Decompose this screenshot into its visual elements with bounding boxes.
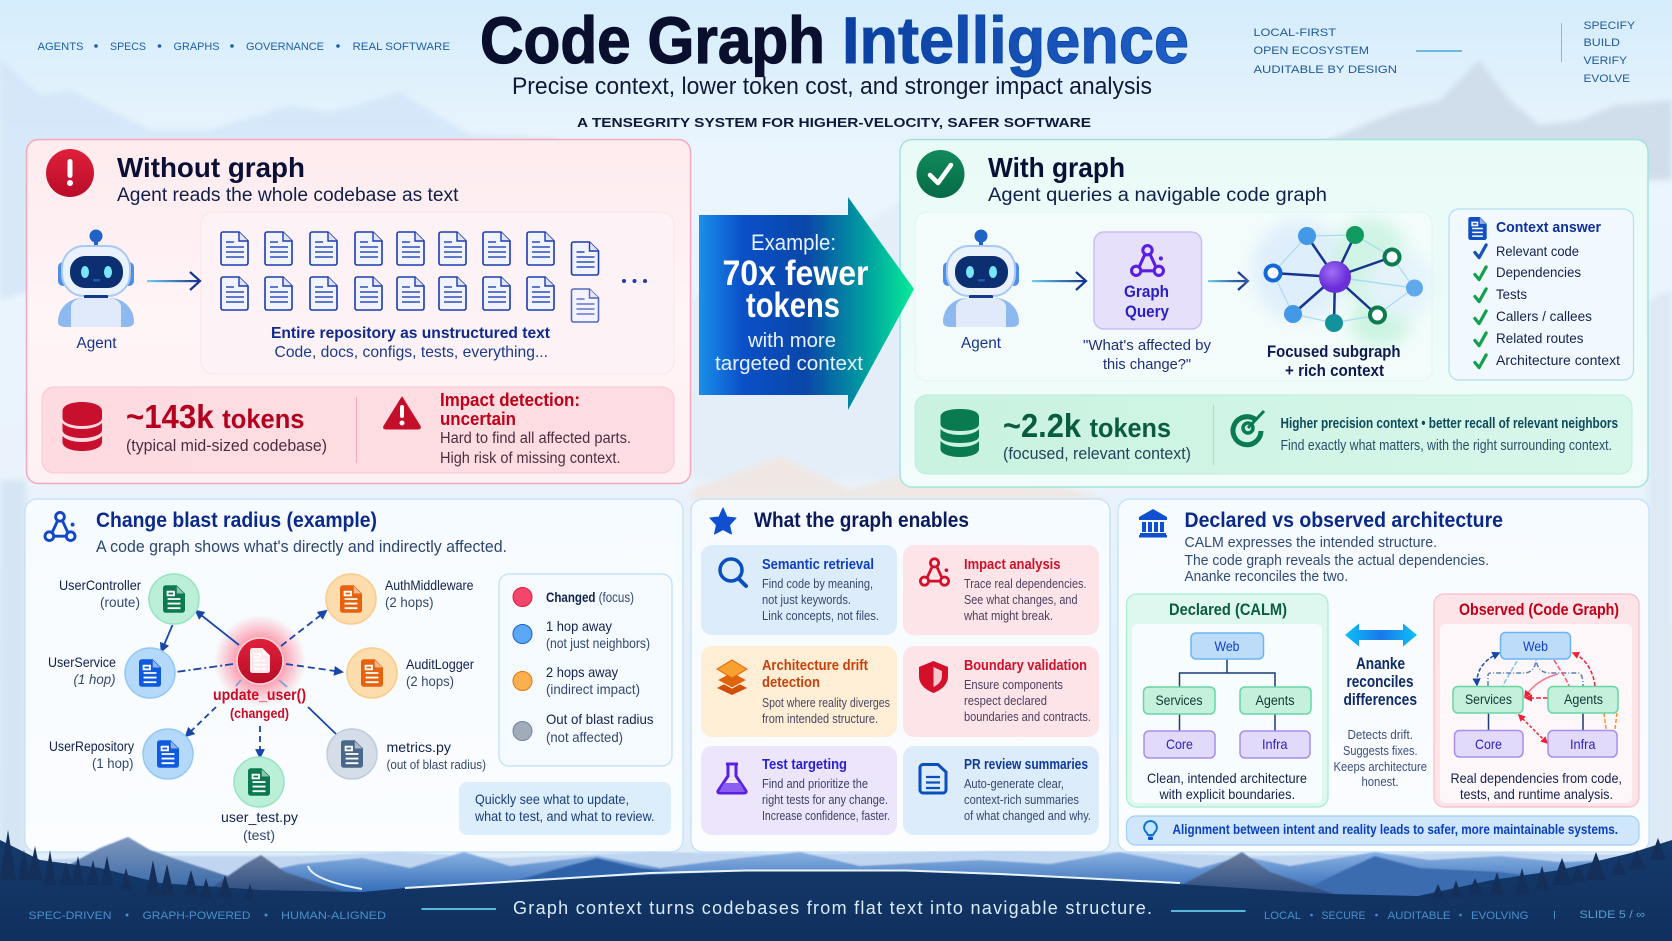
heading: Change blast radius (example) xyxy=(96,509,377,532)
document grid xyxy=(221,232,647,322)
header: top left keywords: GRAPHS xyxy=(174,41,220,53)
context answer card: Context answer xyxy=(1496,219,1601,236)
node labels: UserController xyxy=(59,577,141,593)
icon: check xyxy=(916,150,964,198)
node: user_test xyxy=(234,757,284,807)
header: workflow steps: VERIFY xyxy=(1584,55,1628,67)
node: core: Core xyxy=(1166,736,1193,752)
node: agents: Agents xyxy=(1564,692,1603,707)
divider xyxy=(1213,405,1214,465)
checklist: Tests xyxy=(1496,286,1527,302)
repository box xyxy=(201,212,674,374)
footer message: Graph context turns codebases from flat text into navigable structure. xyxy=(513,898,1152,918)
node: infra xyxy=(1240,731,1310,758)
declared caption: with explicit boundaries. xyxy=(1159,786,1295,802)
heading: without graph: Without graph xyxy=(117,152,305,183)
card: semantic retrieval: Link concepts, not files. xyxy=(762,608,879,623)
legend: (not affected) xyxy=(546,729,623,745)
node: agents: Agents xyxy=(1256,693,1295,708)
stat bar: focused tokens xyxy=(915,395,1632,474)
impact text: uncertain xyxy=(440,409,516,429)
card: boundary validation xyxy=(903,646,1099,737)
header: top right principles: LOCAL-FIRST xyxy=(1254,27,1336,39)
subheading: A code graph shows what's directly and indirectly affected. xyxy=(96,537,507,556)
icon: star xyxy=(710,508,736,534)
card: test targeting xyxy=(701,746,897,835)
footer text: left tags: HUMAN-ALIGNED xyxy=(281,910,386,922)
query caption: "What's affected by xyxy=(1083,337,1211,354)
node labels: (2 hops) xyxy=(385,594,434,610)
foreground navy hills xyxy=(0,840,1672,941)
node: core: Core xyxy=(1475,736,1502,752)
node: UserService xyxy=(125,648,175,698)
header: workflow steps: SPECIFY xyxy=(1584,20,1636,32)
tree line right xyxy=(1432,838,1666,898)
card: architecture drift: from intended structure. xyxy=(762,711,878,726)
icon: institution xyxy=(1139,509,1167,538)
node: core xyxy=(1454,730,1523,757)
card: impact analysis: Impact analysis xyxy=(964,556,1060,573)
subgraph caption xyxy=(1267,343,1400,380)
icon: layers xyxy=(717,660,747,695)
node labels: update_user() xyxy=(213,687,306,704)
icon: database xyxy=(940,409,979,457)
panel: with graph xyxy=(900,140,1648,487)
context answer card xyxy=(1449,209,1634,380)
node labels: AuditLogger xyxy=(406,656,474,672)
card: architecture drift: Spot where reality diverges xyxy=(762,695,890,710)
declared box xyxy=(1126,594,1328,807)
node labels xyxy=(48,577,486,843)
icon: light bulb xyxy=(1144,821,1157,840)
card: PR review summaries: PR review summaries xyxy=(964,756,1088,773)
repository caption xyxy=(271,325,551,361)
header: top left keywords: GOVERNANCE xyxy=(246,41,324,53)
big arrow: 70x fewer tokens: tokens xyxy=(746,286,840,325)
icon: graph xyxy=(1132,246,1163,275)
node: agents xyxy=(1240,687,1311,714)
header: top right principles xyxy=(1254,27,1397,76)
header: top right principles: OPEN ECOSYSTEM xyxy=(1254,45,1369,57)
query caption: this change?" xyxy=(1103,356,1191,373)
node: services: Services xyxy=(1156,693,1203,708)
node: core xyxy=(1144,731,1215,758)
node labels: (1 hop) xyxy=(74,671,116,687)
reconcile text: honest. xyxy=(1362,774,1398,789)
observed caption: Real dependencies from code, xyxy=(1450,770,1622,786)
arrow: agent to repo xyxy=(147,272,200,290)
card: impact analysis xyxy=(903,545,1099,635)
footer text: right tags: SECURE xyxy=(1322,910,1366,922)
footer text: right tags xyxy=(1264,910,1555,922)
footer text: left tags xyxy=(28,910,386,922)
panel: declared vs observed architecture xyxy=(1118,499,1649,852)
icon: alert xyxy=(46,149,94,197)
declared caption: Clean, intended architecture xyxy=(1147,770,1307,786)
description: The code graph reveals the actual dependencies. xyxy=(1184,553,1489,569)
reconcile text: reconciles xyxy=(1346,673,1414,691)
title xyxy=(480,3,1189,77)
node: agents xyxy=(1548,686,1618,713)
node labels: (out of blast radius) xyxy=(386,757,486,772)
legend: 1 hop away xyxy=(546,618,612,634)
node: services: Services xyxy=(1465,692,1512,707)
header: top left keywords: AGENTS xyxy=(38,41,84,53)
header: top left keywords: SPECS xyxy=(110,41,146,53)
node: web: Web xyxy=(1214,638,1240,654)
description xyxy=(1184,535,1489,585)
subtitle: Precise context, lower token cost, and stronger impact analysis xyxy=(512,73,1152,100)
node: web: Web xyxy=(1523,638,1548,654)
node labels: UserRepository xyxy=(49,738,134,754)
impact text xyxy=(440,390,631,467)
big arrow: 70x fewer tokens xyxy=(699,197,914,410)
card: boundary validation: boundaries and contracts. xyxy=(964,709,1091,724)
node labels: (2 hops) xyxy=(406,673,454,689)
card: architecture drift: Architecture drift xyxy=(762,657,868,674)
node labels: AuthMiddleware xyxy=(385,577,474,593)
header: workflow steps: EVOLVE xyxy=(1584,73,1630,85)
checklist: Architecture context xyxy=(1496,352,1620,368)
heading: Declared vs observed architecture xyxy=(1184,509,1503,532)
observed caption xyxy=(1450,770,1622,802)
arrow: query to subgraph xyxy=(1208,272,1248,290)
reconcile text: Detects drift. xyxy=(1348,727,1413,742)
focused subgraph xyxy=(1252,218,1434,346)
card: boundary validation: Boundary validation xyxy=(964,657,1087,674)
observed caption: tests, and runtime analysis. xyxy=(1460,786,1613,802)
node labels: (test) xyxy=(243,827,275,843)
card: impact analysis: Trace real dependencies. xyxy=(964,576,1086,591)
benefit text xyxy=(1280,415,1618,454)
card: semantic retrieval: Semantic retrieval xyxy=(762,556,874,573)
icon: agent robot xyxy=(943,230,1019,327)
repository caption: Entire repository as unstructured text xyxy=(271,325,551,342)
slide number: SLIDE 5 / ∞ xyxy=(1580,909,1645,921)
graph query box: Query xyxy=(1125,303,1170,321)
legend: 2 hops away xyxy=(546,664,618,680)
card: test targeting: Find and prioritize the xyxy=(762,776,868,791)
checklist: Relevant code xyxy=(1496,243,1579,259)
footer text: right tags: LOCAL xyxy=(1264,910,1301,922)
subheading: Agent reads the whole codebase as text xyxy=(117,185,459,206)
label: agent: Agent xyxy=(76,335,117,352)
stat: 2.2k tokens: ~2.2k tokens xyxy=(1003,407,1171,444)
icon: graph xyxy=(920,559,949,585)
node: UserController xyxy=(149,574,199,624)
subgraph caption: Focused subgraph xyxy=(1267,343,1400,361)
tagline: A TENSEGRITY SYSTEM FOR HIGHER-VELOCITY, SAFER SOFTWARE xyxy=(577,115,1091,130)
card: test targeting: Test targeting xyxy=(762,756,847,773)
checklist: Dependencies xyxy=(1496,264,1581,280)
header: top left keywords xyxy=(38,41,450,53)
icon: document xyxy=(920,764,946,793)
legend xyxy=(499,574,672,766)
stat caption: (typical mid-sized codebase) xyxy=(126,436,327,455)
card: test targeting: Increase confidence, faster. xyxy=(762,808,890,823)
panel: change blast radius xyxy=(25,499,683,852)
callout: quick summary: Quickly see what to update, xyxy=(475,791,629,807)
node: infra: Infra xyxy=(1262,736,1288,752)
legend: Changed (focus) xyxy=(546,589,634,605)
card: PR review summaries: context-rich summaries xyxy=(964,792,1079,807)
query caption xyxy=(1083,337,1211,373)
double arrow xyxy=(1345,624,1417,646)
card: impact analysis: what might break. xyxy=(963,608,1053,623)
observed dependency arrows xyxy=(1477,653,1617,743)
callout: quick summary: what to test, and what to review. xyxy=(474,808,654,824)
header: workflow steps: BUILD xyxy=(1584,37,1620,49)
footer text: right tags: AUDITABLE xyxy=(1388,910,1450,922)
node: infra: Infra xyxy=(1570,736,1596,752)
node: AuthMiddleware xyxy=(326,574,376,624)
legend: Out of blast radius xyxy=(546,711,654,727)
node: services xyxy=(1144,687,1215,714)
checklist: Related routes xyxy=(1496,330,1584,346)
declared tree connectors xyxy=(1180,659,1275,731)
node labels: (1 hop) xyxy=(92,755,134,771)
big arrow: 70x fewer tokens: 70x fewer xyxy=(722,254,869,293)
card: semantic retrieval: Find code by meaning, xyxy=(762,576,873,591)
divider xyxy=(356,397,357,463)
flow container xyxy=(915,212,1432,381)
observed box: Observed (Code Graph) xyxy=(1459,600,1619,619)
description: Ananke reconciles the two. xyxy=(1184,569,1348,585)
reconcile text: Suggests fixes. xyxy=(1343,743,1418,758)
node: update_user xyxy=(237,638,283,684)
stat: 143k tokens: ~143k tokens xyxy=(126,398,304,435)
card: boundary validation: respect declared xyxy=(964,693,1047,708)
checklist: Callers / callees xyxy=(1496,308,1592,324)
reconcile text: Keeps architecture xyxy=(1334,759,1427,774)
reconcile text xyxy=(1334,655,1427,789)
node labels: metrics.py xyxy=(386,739,451,755)
node: web xyxy=(1500,632,1570,659)
road highlight xyxy=(308,866,1180,889)
icon: target xyxy=(1233,411,1264,445)
stat caption: (focused, relevant context) xyxy=(1003,444,1191,463)
icon: shield xyxy=(919,661,948,693)
tree line left xyxy=(0,830,255,900)
observed box xyxy=(1434,594,1639,807)
node labels: (changed) xyxy=(230,705,289,721)
impact text: Hard to find all affected parts. xyxy=(440,430,631,447)
node labels: user_test.py xyxy=(221,809,298,825)
subheading: Agent queries a navigable code graph xyxy=(988,185,1327,206)
header: workflow steps xyxy=(1584,20,1636,85)
node labels: UserService xyxy=(48,654,116,670)
legend: (indirect impact) xyxy=(546,681,640,697)
footer text: right tags: EVOLVING xyxy=(1471,910,1528,922)
card: PR review summaries xyxy=(903,746,1099,835)
header: top left keywords: REAL SOFTWARE xyxy=(352,41,450,53)
heading: What the graph enables xyxy=(754,509,969,532)
card: boundary validation: Ensure components xyxy=(964,677,1063,692)
impact text: High risk of missing context. xyxy=(440,450,620,467)
title: Intelligence xyxy=(842,3,1189,77)
card: PR review summaries: of what changed and why. xyxy=(964,808,1091,823)
big arrow: 70x fewer tokens: targeted context xyxy=(715,353,863,375)
declared caption xyxy=(1147,770,1307,802)
blast radius graph xyxy=(48,574,486,843)
alignment banner xyxy=(1126,816,1639,845)
icon: document xyxy=(1468,217,1487,240)
node: infra xyxy=(1548,730,1617,757)
icon: database xyxy=(62,402,102,451)
card: test targeting: right tests for any change. xyxy=(762,792,888,807)
node: AuditLogger xyxy=(347,648,397,698)
declared box: Declared (CALM) xyxy=(1169,600,1287,619)
impact text: Impact detection: xyxy=(440,390,580,410)
stat bar: token cost xyxy=(42,387,674,473)
big arrow: 70x fewer tokens: Example: xyxy=(751,230,836,255)
card: impact analysis: See what changes, and xyxy=(964,592,1078,607)
big arrow: 70x fewer tokens: with more xyxy=(747,330,836,352)
arrow: agent to query xyxy=(1032,272,1086,290)
icon: flask xyxy=(718,764,746,793)
icon: graph xyxy=(45,512,75,541)
icon: search xyxy=(720,559,746,586)
panel: without graph xyxy=(26,140,690,484)
icon: warning triangle xyxy=(384,397,420,429)
node: services xyxy=(1453,686,1523,713)
reconcile text: differences xyxy=(1344,691,1417,709)
card: architecture drift: detection xyxy=(762,674,820,691)
node: UserRepository xyxy=(143,729,193,779)
icon: agent robot xyxy=(58,230,134,327)
card: semantic retrieval xyxy=(701,545,897,635)
card: semantic retrieval: not just keywords. xyxy=(762,592,851,607)
graph query box: Graph xyxy=(1124,283,1169,301)
title: Code Graph xyxy=(480,3,825,77)
node: web xyxy=(1191,633,1264,659)
node: metrics xyxy=(327,729,377,779)
label: agent: Agent xyxy=(961,335,1002,352)
card: PR review summaries: Auto-generate clear, xyxy=(964,776,1064,791)
footer text: left tags: SPEC-DRIVEN xyxy=(28,910,112,922)
header: top right principles: AUDITABLE BY DESIGN xyxy=(1254,64,1397,76)
heading: with graph: With graph xyxy=(988,152,1125,183)
benefit text: Find exactly what matters, with the right surrounding context. xyxy=(1280,437,1612,454)
subgraph caption: + rich context xyxy=(1285,362,1384,380)
legend: (not just neighbors) xyxy=(546,635,650,651)
callout: quick summary xyxy=(459,782,671,835)
repository caption: Code, docs, configs, tests, everything... xyxy=(274,344,548,361)
node labels: (route) xyxy=(100,594,140,610)
footer landscape xyxy=(0,830,1672,941)
graph edges xyxy=(162,611,342,757)
checklist xyxy=(1475,243,1620,368)
graph query box xyxy=(1094,232,1202,329)
description: CALM expresses the intended structure. xyxy=(1184,535,1437,551)
card: architecture drift xyxy=(701,646,897,737)
reconcile text: Ananke xyxy=(1356,655,1405,673)
panel: what the graph enables xyxy=(691,499,1110,852)
footer text: left tags: GRAPH-POWERED xyxy=(142,910,251,922)
